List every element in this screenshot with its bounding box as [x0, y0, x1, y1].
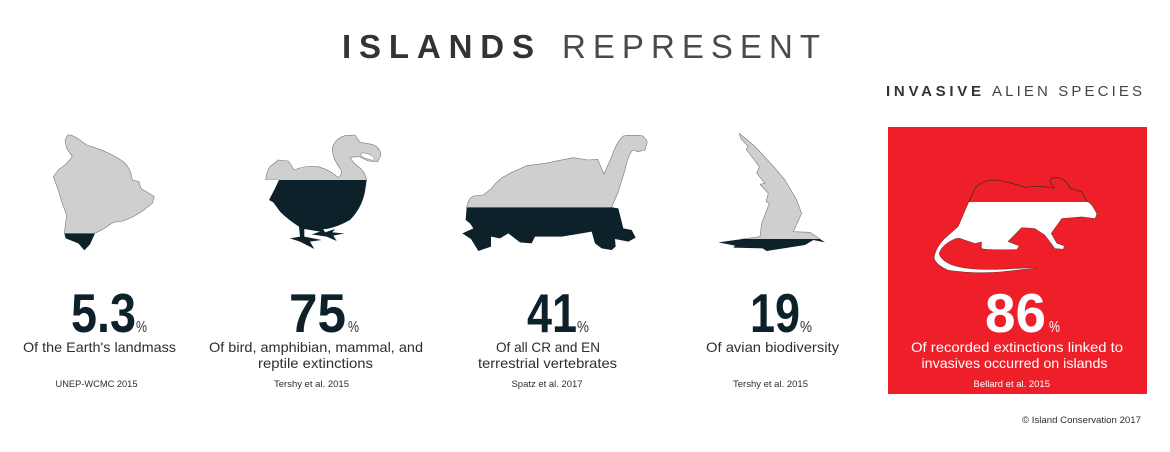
stat: invasives: Bellard et al. 2015: [974, 379, 1050, 390]
icon: rat: [934, 177, 1097, 273]
stat: avian biodiversity: 19: [750, 282, 800, 344]
stat: invasives: [911, 282, 1123, 390]
title: [342, 28, 820, 65]
stat: invasives: 86: [985, 282, 1046, 344]
stat: avian biodiversity: Tershy et al. 2015: [733, 379, 808, 390]
stat: landmass: %: [136, 319, 147, 336]
icon: island: [53, 135, 154, 250]
stat: extinctions: 75: [289, 282, 346, 344]
heading: invasive alien species: INVASIVE: [886, 83, 981, 100]
heading: invasive alien species: ALIEN SPECIES: [992, 83, 1142, 100]
icon: seabird: [718, 133, 825, 251]
stat: extinctions: [209, 282, 423, 390]
stat: vertebrates: 41: [527, 282, 577, 344]
stat: landmass: Of the Earth's landmass: [23, 339, 176, 355]
stat: avian biodiversity: [706, 282, 839, 390]
stat: extinctions: Of bird, amphibian, mammal, and: [209, 339, 423, 355]
stat: vertebrates: %: [577, 319, 589, 336]
stat: vertebrates: [478, 282, 617, 390]
stat: extinctions: Tershy et al. 2015: [274, 379, 349, 390]
stat: avian biodiversity: Of avian biodiversity: [706, 339, 839, 355]
stat: vertebrates: terrestrial vertebrates: [478, 355, 617, 371]
icon: tortoise: [462, 135, 647, 251]
stat: vertebrates: Spatz et al. 2017: [512, 379, 582, 390]
heading: invasive alien species: [886, 83, 1142, 100]
copyright: © Island Conservation 2017: [1022, 415, 1141, 426]
stat: landmass: [23, 282, 176, 390]
panel: red background: [888, 127, 1147, 394]
stat: avian biodiversity: %: [800, 319, 812, 336]
stat: vertebrates: Of all CR and EN: [496, 339, 600, 355]
stat: landmass: UNEP-WCMC 2015: [56, 379, 138, 390]
stat: extinctions: %: [348, 319, 359, 336]
title: ISLANDS: [342, 28, 534, 65]
icon: dodo: [266, 135, 381, 249]
stat: invasives: %: [1049, 319, 1060, 336]
stat: extinctions: reptile extinctions: [258, 355, 373, 371]
stat: invasives: invasives occurred on islands: [922, 355, 1108, 371]
title: REPRESENT: [562, 28, 820, 65]
stat: invasives: Of recorded extinctions linked to: [911, 339, 1123, 355]
stat: landmass: 5.3: [71, 282, 136, 344]
